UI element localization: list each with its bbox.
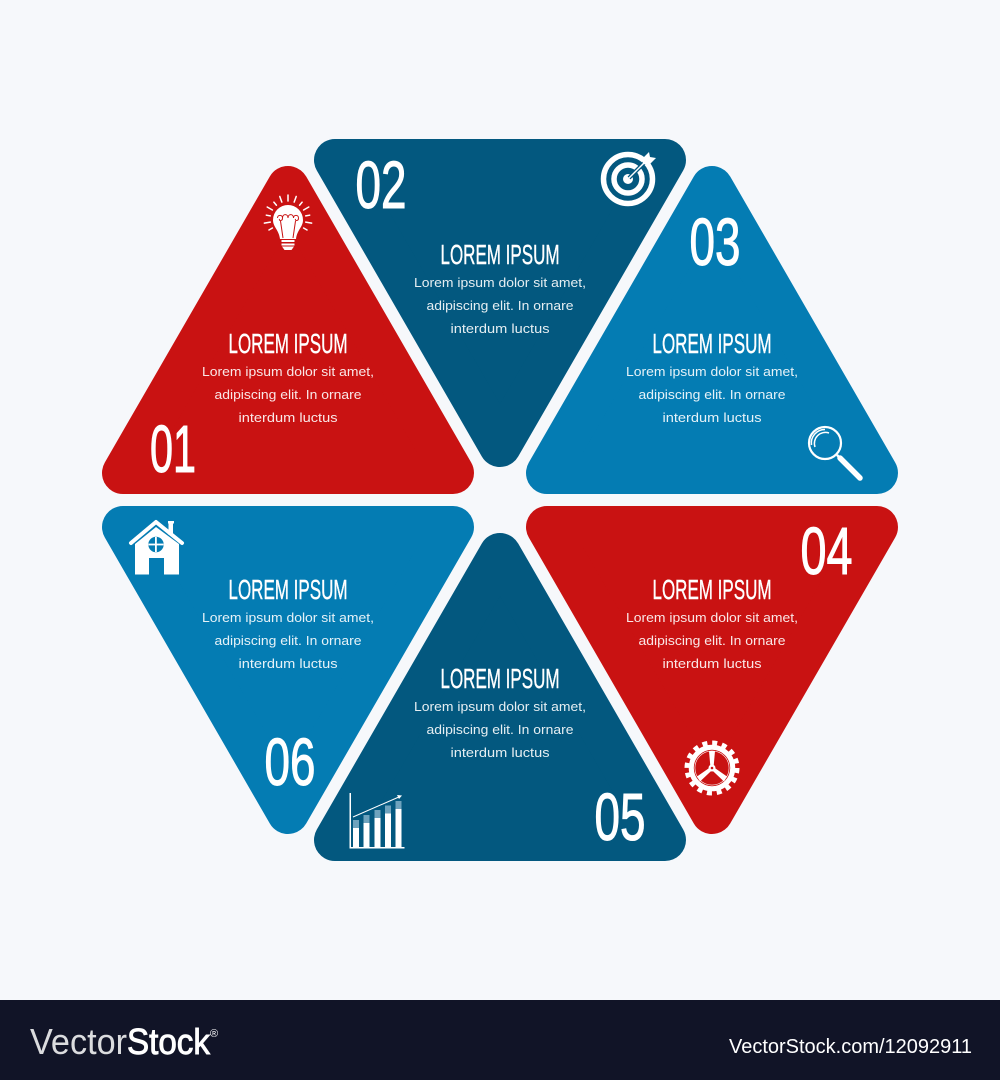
panel 05: dark blue triangle	[335, 554, 665, 855]
number 03: 03	[690, 205, 740, 280]
text block 06: interdum luctus	[238, 656, 338, 671]
footer logo: ®	[210, 1028, 218, 1040]
panel 03: blue triangle	[547, 187, 877, 478]
panel 02: dark blue triangle	[335, 148, 665, 446]
footer logo: Vector	[30, 1021, 127, 1062]
text block 05: adipiscing elit. In ornare	[426, 722, 574, 737]
text block 05	[414, 699, 586, 760]
text block 03: interdum luctus	[662, 410, 762, 425]
text block 02: interdum luctus	[450, 321, 550, 336]
text block 02: Lorem ipsum dolor sit amet,	[414, 275, 586, 290]
number 05: 05	[594, 780, 646, 855]
heading 01: LOREM IPSUM	[228, 328, 348, 359]
text block 01: Lorem ipsum dolor sit amet,	[202, 364, 374, 379]
text block 06: adipiscing elit. In ornare	[214, 633, 362, 648]
text block 01: adipiscing elit. In ornare	[214, 387, 362, 402]
text block 04: Lorem ipsum dolor sit amet,	[626, 610, 798, 625]
icon: magnifying glass	[809, 427, 860, 478]
text block 05: interdum luctus	[450, 745, 550, 760]
text block 02	[414, 275, 586, 336]
panel 01: red triangle	[123, 187, 453, 487]
heading 03: LOREM IPSUM	[652, 328, 772, 359]
footer image id: VectorStock.com/12092911	[729, 1036, 972, 1058]
text block 04: adipiscing elit. In ornare	[638, 633, 786, 648]
text block 06	[202, 610, 374, 671]
text block 06: Lorem ipsum dolor sit amet,	[202, 610, 374, 625]
footer logo: Stock	[127, 1021, 211, 1062]
text block 04	[626, 610, 798, 671]
panel 06: blue triangle	[123, 521, 453, 813]
heading 06: LOREM IPSUM	[228, 574, 348, 605]
text block 03: adipiscing elit. In ornare	[638, 387, 786, 402]
panel 04: red triangle	[547, 514, 877, 813]
text block 01: interdum luctus	[238, 410, 338, 425]
footer bar	[0, 1000, 1000, 1080]
text block 04: interdum luctus	[662, 656, 762, 671]
footer logo	[30, 1021, 218, 1062]
number 04: 04	[800, 514, 852, 589]
text block 03: Lorem ipsum dolor sit amet,	[626, 364, 798, 379]
heading 04: LOREM IPSUM	[652, 574, 772, 605]
heading 05: LOREM IPSUM	[440, 663, 560, 694]
icon: gear	[687, 743, 737, 793]
icon: target with arrow	[604, 152, 656, 204]
number 01: 01	[150, 412, 196, 487]
text block 02: adipiscing elit. In ornare	[426, 298, 574, 313]
icon: house	[131, 521, 182, 574]
icon: light bulb	[264, 195, 312, 250]
icon: bar chart with arrow	[350, 793, 404, 848]
number 02: 02	[356, 148, 406, 223]
text block 01	[202, 364, 374, 425]
text block 05: Lorem ipsum dolor sit amet,	[414, 699, 586, 714]
heading 02: LOREM IPSUM	[440, 239, 560, 270]
text block 03	[626, 364, 798, 425]
number 06: 06	[264, 725, 316, 800]
